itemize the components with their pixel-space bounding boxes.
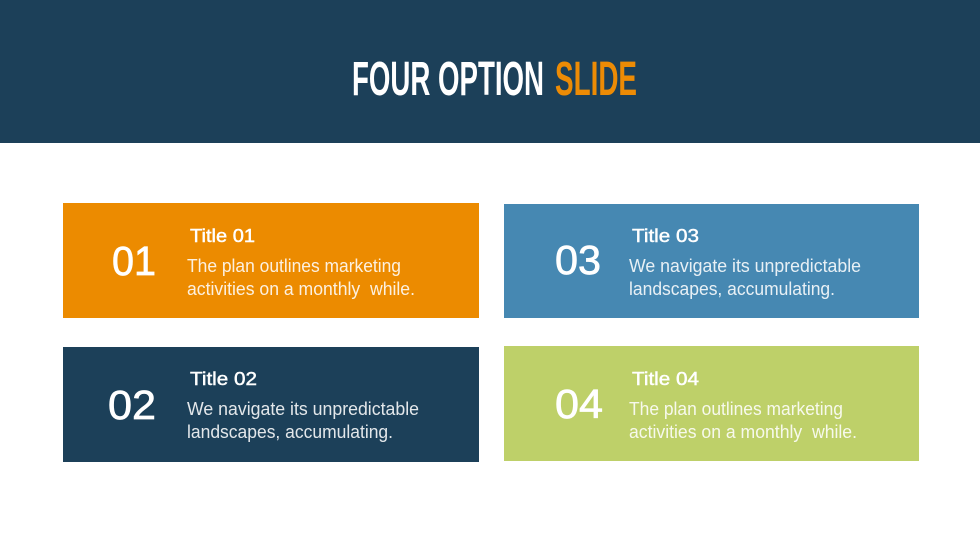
number 01: 01 (112, 238, 156, 284)
title: SLIDE (555, 53, 637, 106)
description 01 (187, 256, 415, 299)
description 02 (187, 399, 419, 442)
heading: Title 01: Title 01 (190, 225, 255, 246)
panel: option 02 (63, 347, 479, 462)
header band with title (0, 0, 980, 143)
heading: Title 03: Title 03 (632, 225, 699, 246)
heading: Title 04: Title 04 (632, 368, 699, 389)
description 03 (629, 256, 861, 299)
number 03: 03 (555, 237, 601, 283)
description 03: landscapes, accumulating. (629, 279, 835, 299)
description 03: We navigate its unpredictable (629, 256, 861, 276)
heading: Title 02: Title 02 (190, 368, 257, 389)
description 01: activities on a monthly while. (187, 279, 415, 299)
description 04 (629, 399, 857, 442)
panel: option 03 (504, 204, 919, 318)
description 01: The plan outlines marketing (187, 256, 401, 276)
description 04: activities on a monthly while. (629, 422, 857, 442)
number 04: 04 (555, 381, 603, 427)
number 02: 02 (108, 382, 156, 428)
description 02: We navigate its unpredictable (187, 399, 419, 419)
description 04: The plan outlines marketing (629, 399, 843, 419)
panel: option 01 (63, 203, 479, 318)
description 02: landscapes, accumulating. (187, 422, 393, 442)
panel: option 04 (504, 346, 919, 461)
title: FOUR OPTION (352, 53, 544, 106)
